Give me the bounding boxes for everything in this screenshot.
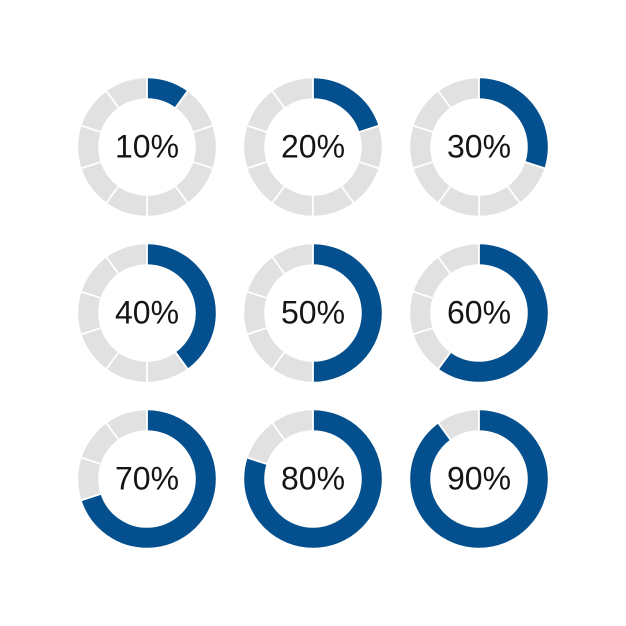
donut chart: 90%: 90% (447, 460, 511, 496)
donut chart: 90% (412, 408, 546, 550)
donut chart: 10%: 10% (115, 128, 179, 164)
donut chart: 30%: 30% (447, 128, 511, 164)
donut chart: 70% (80, 408, 214, 550)
donut chart: 70%: 70% (115, 460, 179, 496)
donut chart: 40%: 40% (115, 294, 179, 330)
donut chart: 80% (246, 408, 380, 550)
donut chart: 50% (246, 242, 380, 384)
donut chart: 40% (80, 242, 214, 384)
donut chart: 80%: 80% (281, 460, 345, 496)
donut chart: 50%: 50% (281, 294, 345, 330)
donut chart: 60%: 60% (447, 294, 511, 330)
donut chart: 20% (246, 76, 380, 218)
donut chart: 20%: 20% (281, 128, 345, 164)
donut chart: 60% (412, 242, 546, 384)
donut chart: 10% (80, 76, 214, 218)
donut chart: 30% (412, 76, 546, 218)
